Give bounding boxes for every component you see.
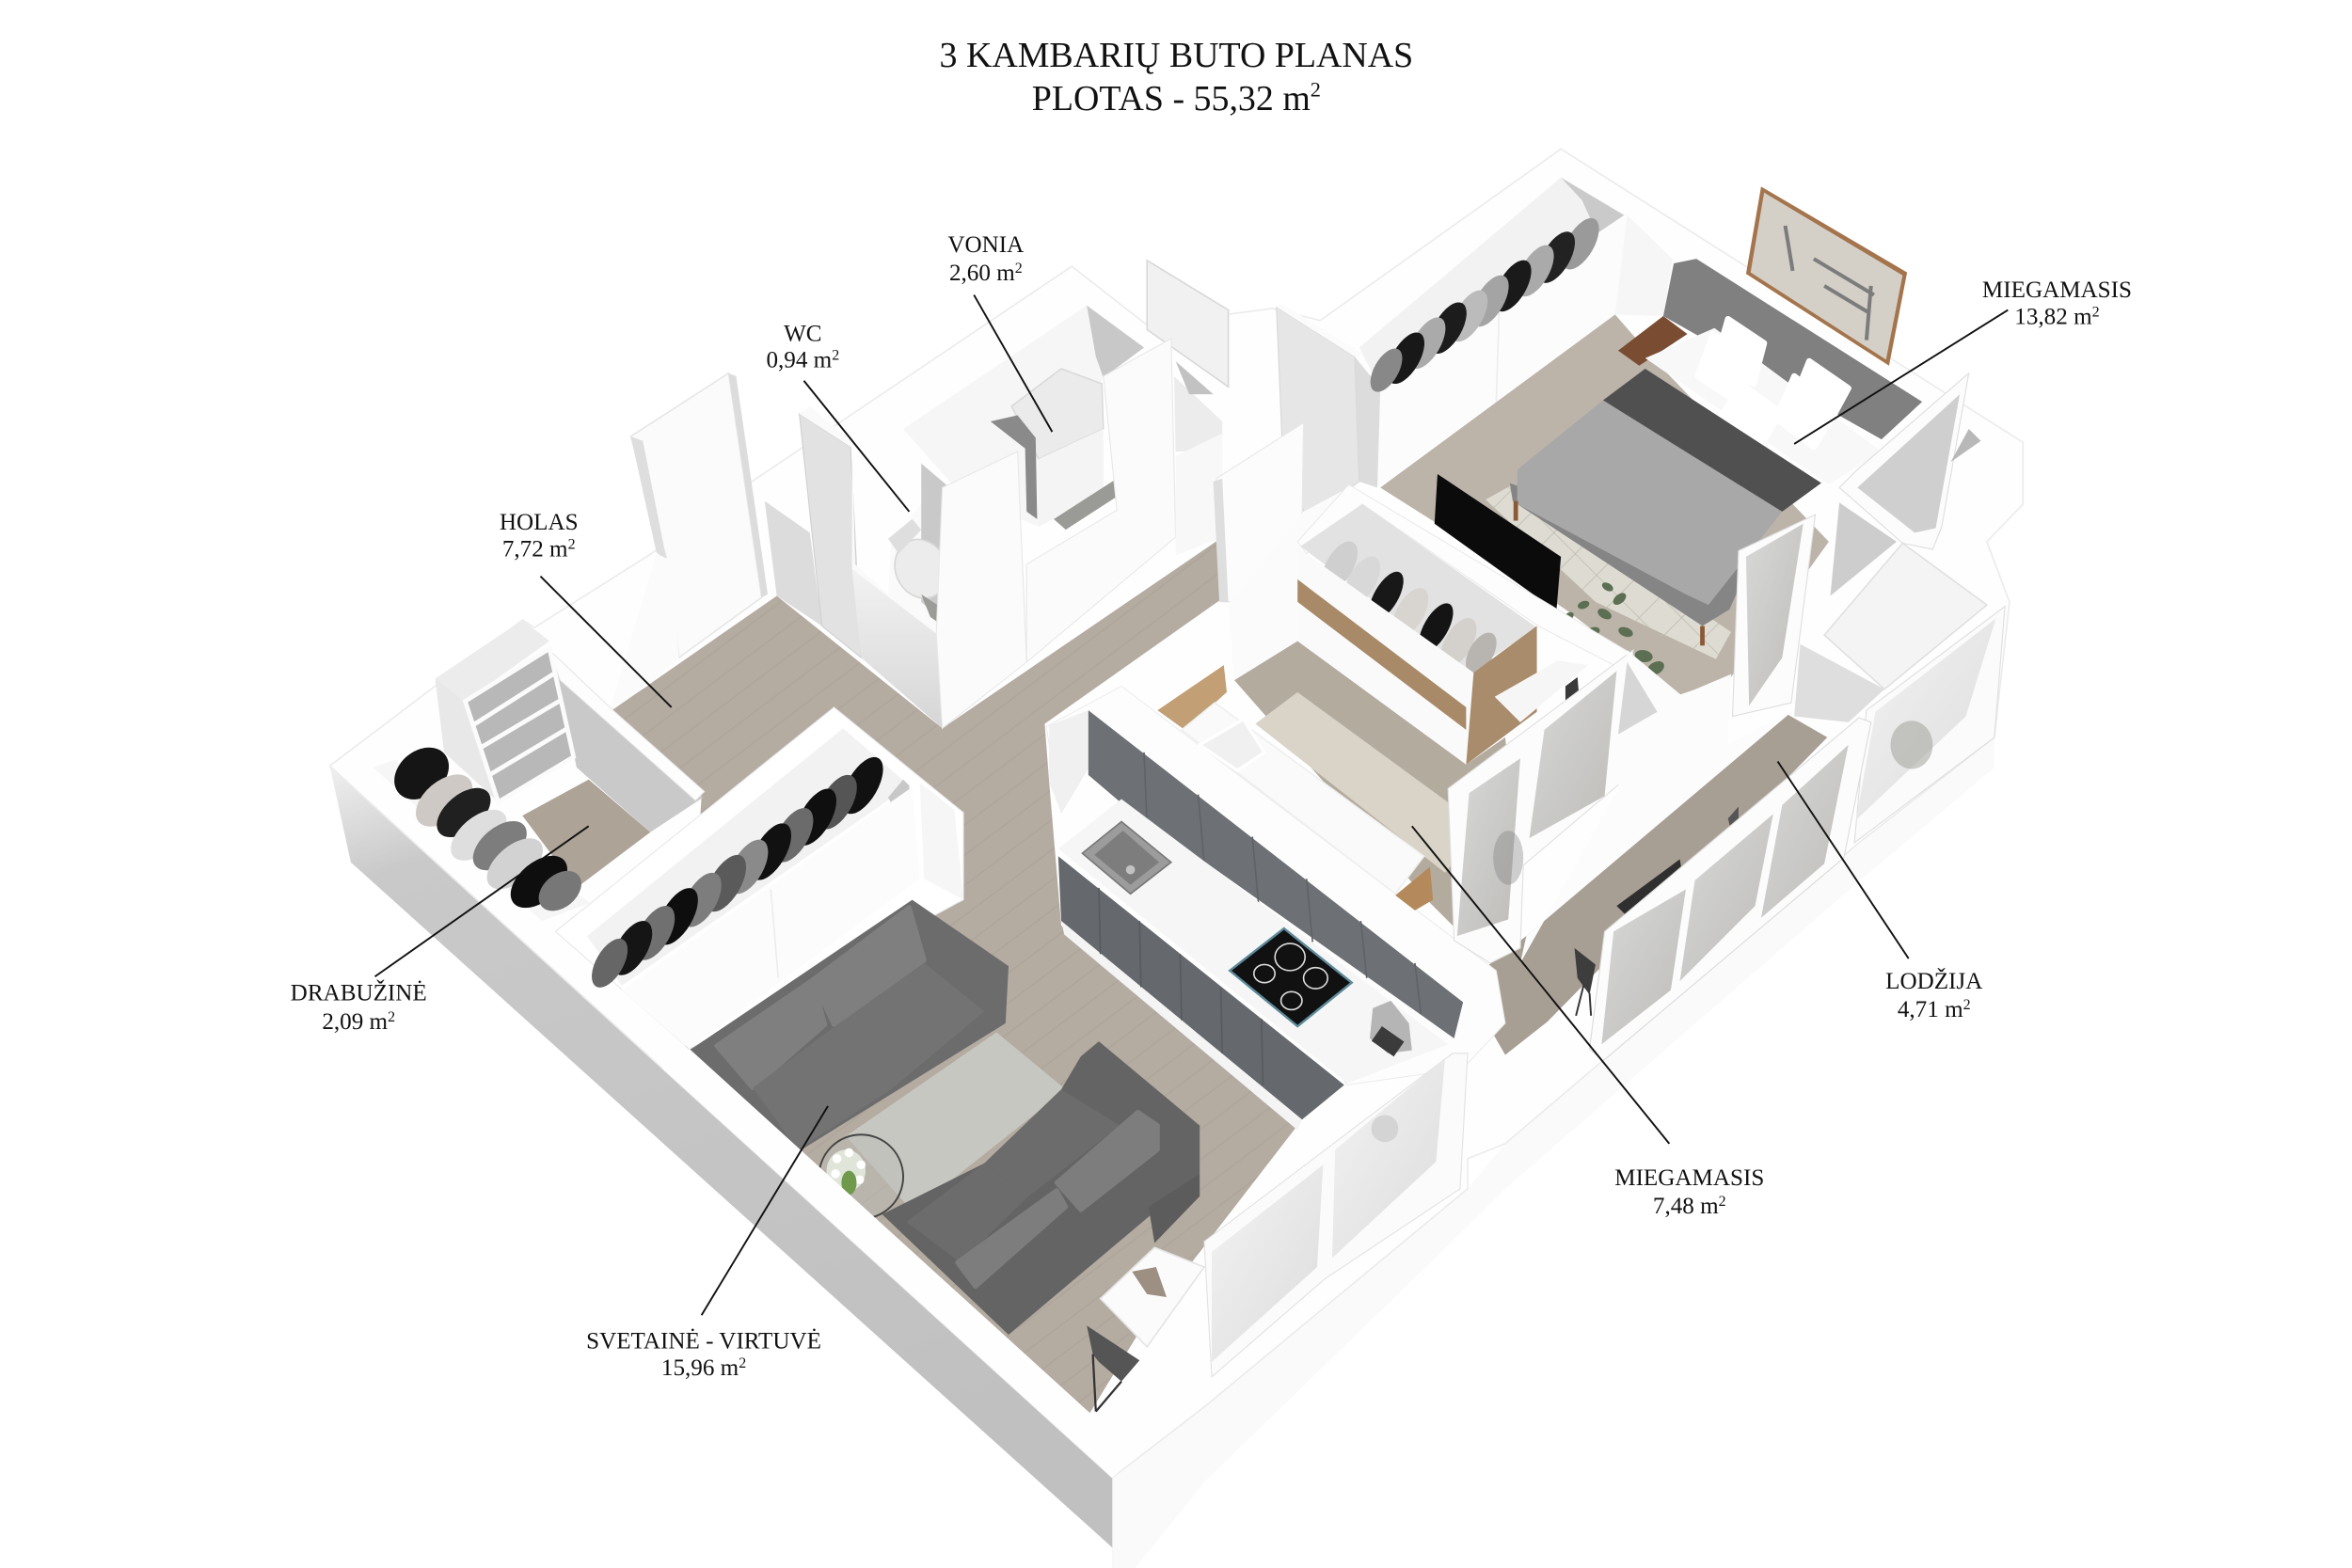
label: wc — [766, 321, 909, 512]
label: drabuzine: 2 — [388, 1009, 395, 1025]
shower partition — [991, 416, 1037, 519]
label: wc: 0,94 m — [766, 348, 832, 373]
bathroom — [903, 306, 1144, 530]
bedroom headboard — [1157, 665, 1227, 730]
bedroom bed — [1182, 703, 1424, 894]
living room window — [1204, 1053, 1468, 1377]
bedroom 7.48 wardrobe — [1297, 484, 1633, 765]
title: 2 — [1311, 77, 1321, 101]
rug: living room — [846, 1032, 1066, 1212]
wash basin area — [1174, 361, 1222, 451]
kitchen countertop — [1058, 799, 1448, 1084]
desk and chair by living window — [1087, 1247, 1204, 1412]
apartment top silhouette — [330, 149, 2023, 1478]
label: wc: WC — [784, 321, 822, 346]
double bed — [1510, 259, 1922, 645]
plant — [1562, 580, 1666, 678]
title — [940, 36, 1413, 119]
label: vonia — [947, 232, 1052, 432]
bedroom 7.48 windows — [1448, 650, 1633, 963]
balcony side glass and top — [1794, 544, 2005, 843]
closet walls and floor — [522, 650, 705, 888]
sofa: upper — [690, 900, 1009, 1156]
left outer wall top — [662, 1049, 1200, 1478]
label: miegamasis 13.82: 2 — [2092, 304, 2100, 320]
label: miegamasis 13.82: 13,82 m — [2014, 304, 2092, 329]
kitchen gray upper panel — [1089, 710, 1463, 1038]
label: vonia: 2 — [1015, 261, 1023, 277]
balcony door — [1733, 515, 1816, 717]
bedroom footboard — [1395, 866, 1433, 911]
TV — [1435, 474, 1561, 611]
label: drabuzine: 2,09 m — [322, 1009, 388, 1035]
label: miegamasis 13.82 — [1794, 277, 2132, 444]
label: vonia: 2,60 m — [949, 261, 1015, 286]
sofa: lower — [882, 1041, 1200, 1335]
toilet — [885, 519, 957, 632]
round table with flowers — [818, 1134, 903, 1219]
label: miegamasis 7.48: 7,48 m — [1653, 1194, 1719, 1219]
label: holas: 2 — [568, 537, 576, 553]
bedroom wardrobe clothes — [1364, 213, 1607, 397]
bathroom door wall — [936, 339, 1222, 728]
label: miegamasis 7.48: 2 — [1719, 1194, 1726, 1210]
living room wardrobe — [555, 707, 963, 1049]
kitchen base cabinets — [1058, 856, 1344, 1130]
label: holas: 7,72 m — [502, 537, 568, 562]
bedroom back wall — [1615, 215, 1673, 316]
floor: hall and living room — [610, 534, 1302, 1413]
floor: loggia — [1483, 715, 1827, 1054]
title: PLOTAS - 55,32 m — [1032, 79, 1311, 119]
bathtub — [1011, 369, 1104, 459]
kitchen sink — [1082, 821, 1171, 894]
shelf unit — [435, 620, 574, 802]
loggia items — [1575, 806, 1739, 1016]
rug: bedroom 7.48 — [1255, 692, 1483, 873]
closet clothes — [373, 736, 590, 921]
label: holas: HOLAS — [500, 510, 579, 535]
coffee machine — [1370, 1001, 1412, 1056]
label: lodzija: 2 — [1963, 997, 1971, 1013]
label: miegamasis 7.48 — [1412, 826, 1764, 1219]
label: drabuzine: DRABUŽINĖ — [291, 980, 427, 1006]
bedroom 7.48 desk — [1495, 660, 1605, 768]
label: lodzija — [1778, 762, 1982, 1022]
wall between bedrooms and loggia — [1520, 650, 1788, 963]
label: lodzija: LODŽIJA — [1885, 968, 1982, 994]
loggia windows — [1590, 718, 1871, 1061]
label: svetaine - virtuve: 15,96 m — [661, 1355, 739, 1381]
chair at window — [1149, 1174, 1200, 1243]
label: drabuzine — [291, 826, 589, 1035]
label: lodzija: 4,71 m — [1898, 997, 1963, 1022]
floor: bedroom 13.82 — [1380, 314, 1829, 695]
hallway wall door — [1214, 423, 1349, 680]
induction hob — [1230, 928, 1352, 1026]
bedroom glass door — [1831, 373, 1980, 596]
pillows — [1698, 319, 1849, 447]
bedroom wardrobe wall — [1355, 178, 1628, 487]
wardrobe clothes — [1314, 535, 1502, 678]
kitchen wall and bedroom bed behind — [1046, 665, 1505, 1085]
bedroom door — [1277, 304, 1362, 519]
label: svetaine - virtuve — [586, 1106, 828, 1381]
label: vonia: VONIA — [947, 232, 1024, 258]
label: wc: 2 — [832, 348, 839, 364]
label: miegamasis 13.82: MIEGAMASIS — [1982, 277, 2132, 303]
label: miegamasis 7.48: MIEGAMASIS — [1614, 1165, 1764, 1191]
label: svetaine - virtuve: SVETAINĖ - VIRTUVĖ — [586, 1328, 821, 1354]
painting — [1746, 186, 1907, 366]
entrance door — [610, 373, 768, 710]
WC wall and door — [765, 406, 951, 728]
wardrobe clothes — [584, 751, 891, 993]
mirror — [1147, 261, 1229, 387]
label: holas — [500, 510, 672, 707]
rug: bedroom 13.82 — [1486, 484, 1731, 659]
label: svetaine - virtuve: 2 — [739, 1355, 746, 1371]
floor: bedroom 7.48 — [1234, 641, 1520, 963]
building outer side faces — [330, 737, 1994, 1568]
nightstand — [1618, 316, 1688, 366]
title: 3 KAMBARIŲ BUTO PLANAS — [940, 36, 1413, 75]
